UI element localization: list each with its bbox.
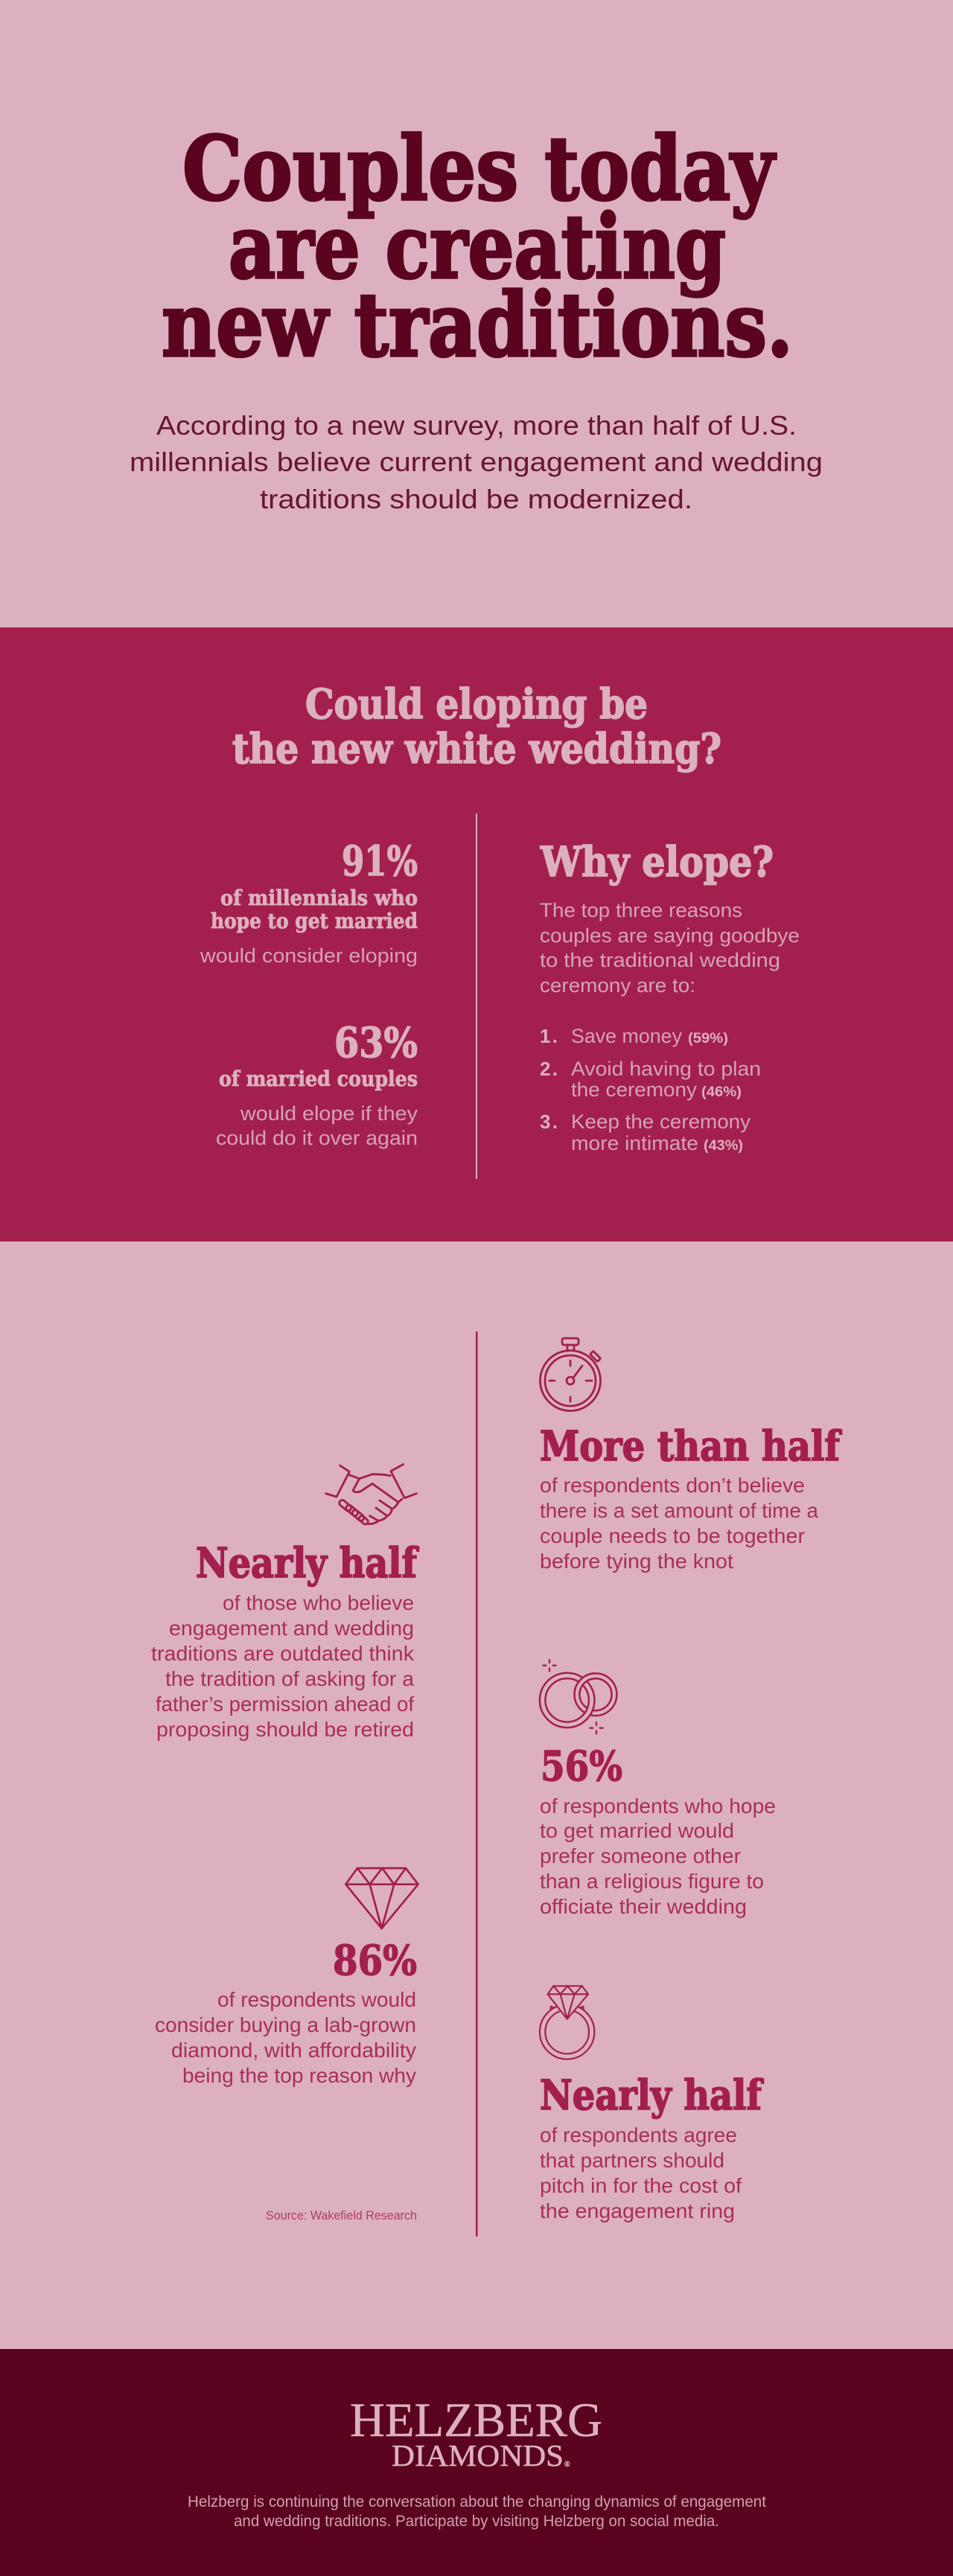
- list of reasons: (59%): [688, 1031, 728, 1046]
- stat: 63%: 63%: [334, 1018, 418, 1067]
- stat: 56%: to get married would: [540, 1819, 734, 1842]
- stat: nearly half, tradition: Nearly half: [196, 1538, 419, 1587]
- list of reasons: (43%): [704, 1138, 743, 1154]
- panel: footer: [0, 2349, 953, 2576]
- logo: Helzberg Diamonds: ®: [564, 2461, 570, 2469]
- stat: more than half: couple needs to be together: [540, 1524, 805, 1547]
- list of reasons: Keep the ceremony: [571, 1110, 751, 1133]
- stat: 63%: would elope if they: [240, 1102, 418, 1125]
- list of reasons: 3.: [540, 1110, 558, 1133]
- eloping heading: Could eloping be: [305, 680, 648, 728]
- intro paragraph: traditions should be modernized.: [260, 484, 692, 514]
- title: [162, 117, 793, 377]
- why elope: to the traditional wedding: [540, 949, 780, 971]
- intro paragraph: [130, 410, 823, 514]
- title: are creating: [229, 195, 726, 298]
- title: new traditions.: [162, 273, 793, 377]
- stat: 86%: [155, 1936, 417, 2087]
- stat: 56%: of respondents who hope: [540, 1794, 776, 1818]
- why elope: Why elope?: [540, 837, 774, 886]
- icon: engagement ring: [540, 1986, 594, 2059]
- icon: wedding rings: [543, 1660, 614, 1733]
- panel: intro: [130, 117, 823, 514]
- list of reasons: more intimate: [571, 1132, 698, 1154]
- source note: Source: Wakefield Research: [266, 2209, 417, 2222]
- stat: nearly half, tradition: proposing should be retired: [156, 1718, 414, 1741]
- stat: more than half: before tying the knot: [540, 1550, 733, 1573]
- stat: more than half: there is a set amount of time a: [540, 1499, 818, 1522]
- stat: 56%: prefer someone other: [540, 1844, 741, 1867]
- why elope: [540, 837, 800, 997]
- stat: 86%: being the top reason why: [182, 2064, 416, 2087]
- stat: 63%: could do it over again: [216, 1127, 418, 1149]
- stat: 91%: of millennials who: [220, 886, 418, 910]
- footer text: and wedding traditions. Participate by visiting Helzberg on social media.: [234, 2513, 719, 2530]
- list of reasons: (46%): [701, 1084, 742, 1100]
- stat: 86%: consider buying a lab-grown: [155, 2013, 416, 2036]
- stat: nearly half, tradition: of those who believe: [223, 1591, 414, 1614]
- list of reasons: 1.: [540, 1025, 558, 1047]
- stat: 91%: [200, 837, 418, 967]
- icon: handshake: [326, 1464, 416, 1525]
- stat: 63%: of married couples: [219, 1067, 418, 1091]
- list of reasons: the ceremony: [571, 1078, 698, 1101]
- intro paragraph: According to a new survey, more than half of U.S.: [156, 410, 797, 441]
- stat: nearly half, tradition: father’s permission ahead of: [156, 1693, 414, 1716]
- stat: 56%: than a religious figure to: [540, 1870, 764, 1893]
- stat: nearly half, ring cost: [540, 2071, 764, 2222]
- stat: 63%: [216, 1018, 418, 1149]
- stat: more than half: of respondents don’t believe: [540, 1474, 805, 1497]
- stat: 56%: officiate their wedding: [540, 1895, 747, 1918]
- why elope: couples are saying goodbye: [540, 924, 800, 947]
- stat: nearly half, ring cost: of respondents agree: [540, 2123, 737, 2147]
- stat: 91%: 91%: [342, 837, 418, 885]
- stat: nearly half, tradition: [151, 1538, 419, 1741]
- stat: nearly half, tradition: traditions are outdated think: [151, 1642, 415, 1665]
- panel: eloping: [0, 627, 953, 1241]
- stat: 56%: [540, 1742, 776, 1918]
- logo: Helzberg Diamonds: [350, 2394, 602, 2473]
- why elope: The top three reasons: [540, 899, 742, 921]
- footer text: [188, 2493, 766, 2530]
- panel: survey stats: [151, 1332, 842, 2237]
- stat: nearly half, ring cost: that partners should: [540, 2149, 724, 2172]
- icon: stopwatch: [541, 1338, 601, 1411]
- intro paragraph: millennials believe current engagement and wedding: [130, 447, 823, 477]
- stat: more than half: More than half: [540, 1422, 842, 1470]
- logo: Helzberg Diamonds: HELZBERG: [350, 2394, 602, 2447]
- eloping heading: the new white wedding?: [232, 724, 721, 773]
- stat: nearly half, tradition: the tradition of asking for a: [165, 1667, 414, 1690]
- stat: nearly half, tradition: engagement and wedding: [169, 1617, 414, 1640]
- list of reasons: [540, 1025, 761, 1154]
- stat: 86%: diamond, with affordability: [171, 2039, 416, 2062]
- stat: nearly half, ring cost: pitch in for the cost of: [540, 2174, 742, 2197]
- list of reasons: 2.: [540, 1058, 558, 1080]
- list of reasons: Save money: [571, 1025, 682, 1047]
- stat: 56%: 56%: [541, 1742, 622, 1790]
- logo: Helzberg Diamonds: DIAMONDS: [392, 2438, 564, 2473]
- stat: 91%: hope to get married: [211, 909, 418, 933]
- eloping heading: [232, 680, 721, 773]
- title: Couples today: [182, 117, 777, 220]
- stat: 86%: 86%: [333, 1936, 417, 1984]
- list of reasons: Avoid having to plan: [571, 1058, 761, 1080]
- stat: more than half: [540, 1422, 842, 1573]
- stat: nearly half, ring cost: Nearly half: [540, 2071, 764, 2119]
- icon: diamond: [345, 1868, 418, 1928]
- stat: 91%: would consider eloping: [200, 945, 418, 967]
- stat: 86%: of respondents would: [217, 1988, 416, 2011]
- footer text: Helzberg is continuing the conversation about the changing dynamics of engagement: [188, 2493, 766, 2511]
- stat: nearly half, ring cost: the engagement ring: [540, 2199, 735, 2222]
- why elope: ceremony are to:: [540, 974, 695, 997]
